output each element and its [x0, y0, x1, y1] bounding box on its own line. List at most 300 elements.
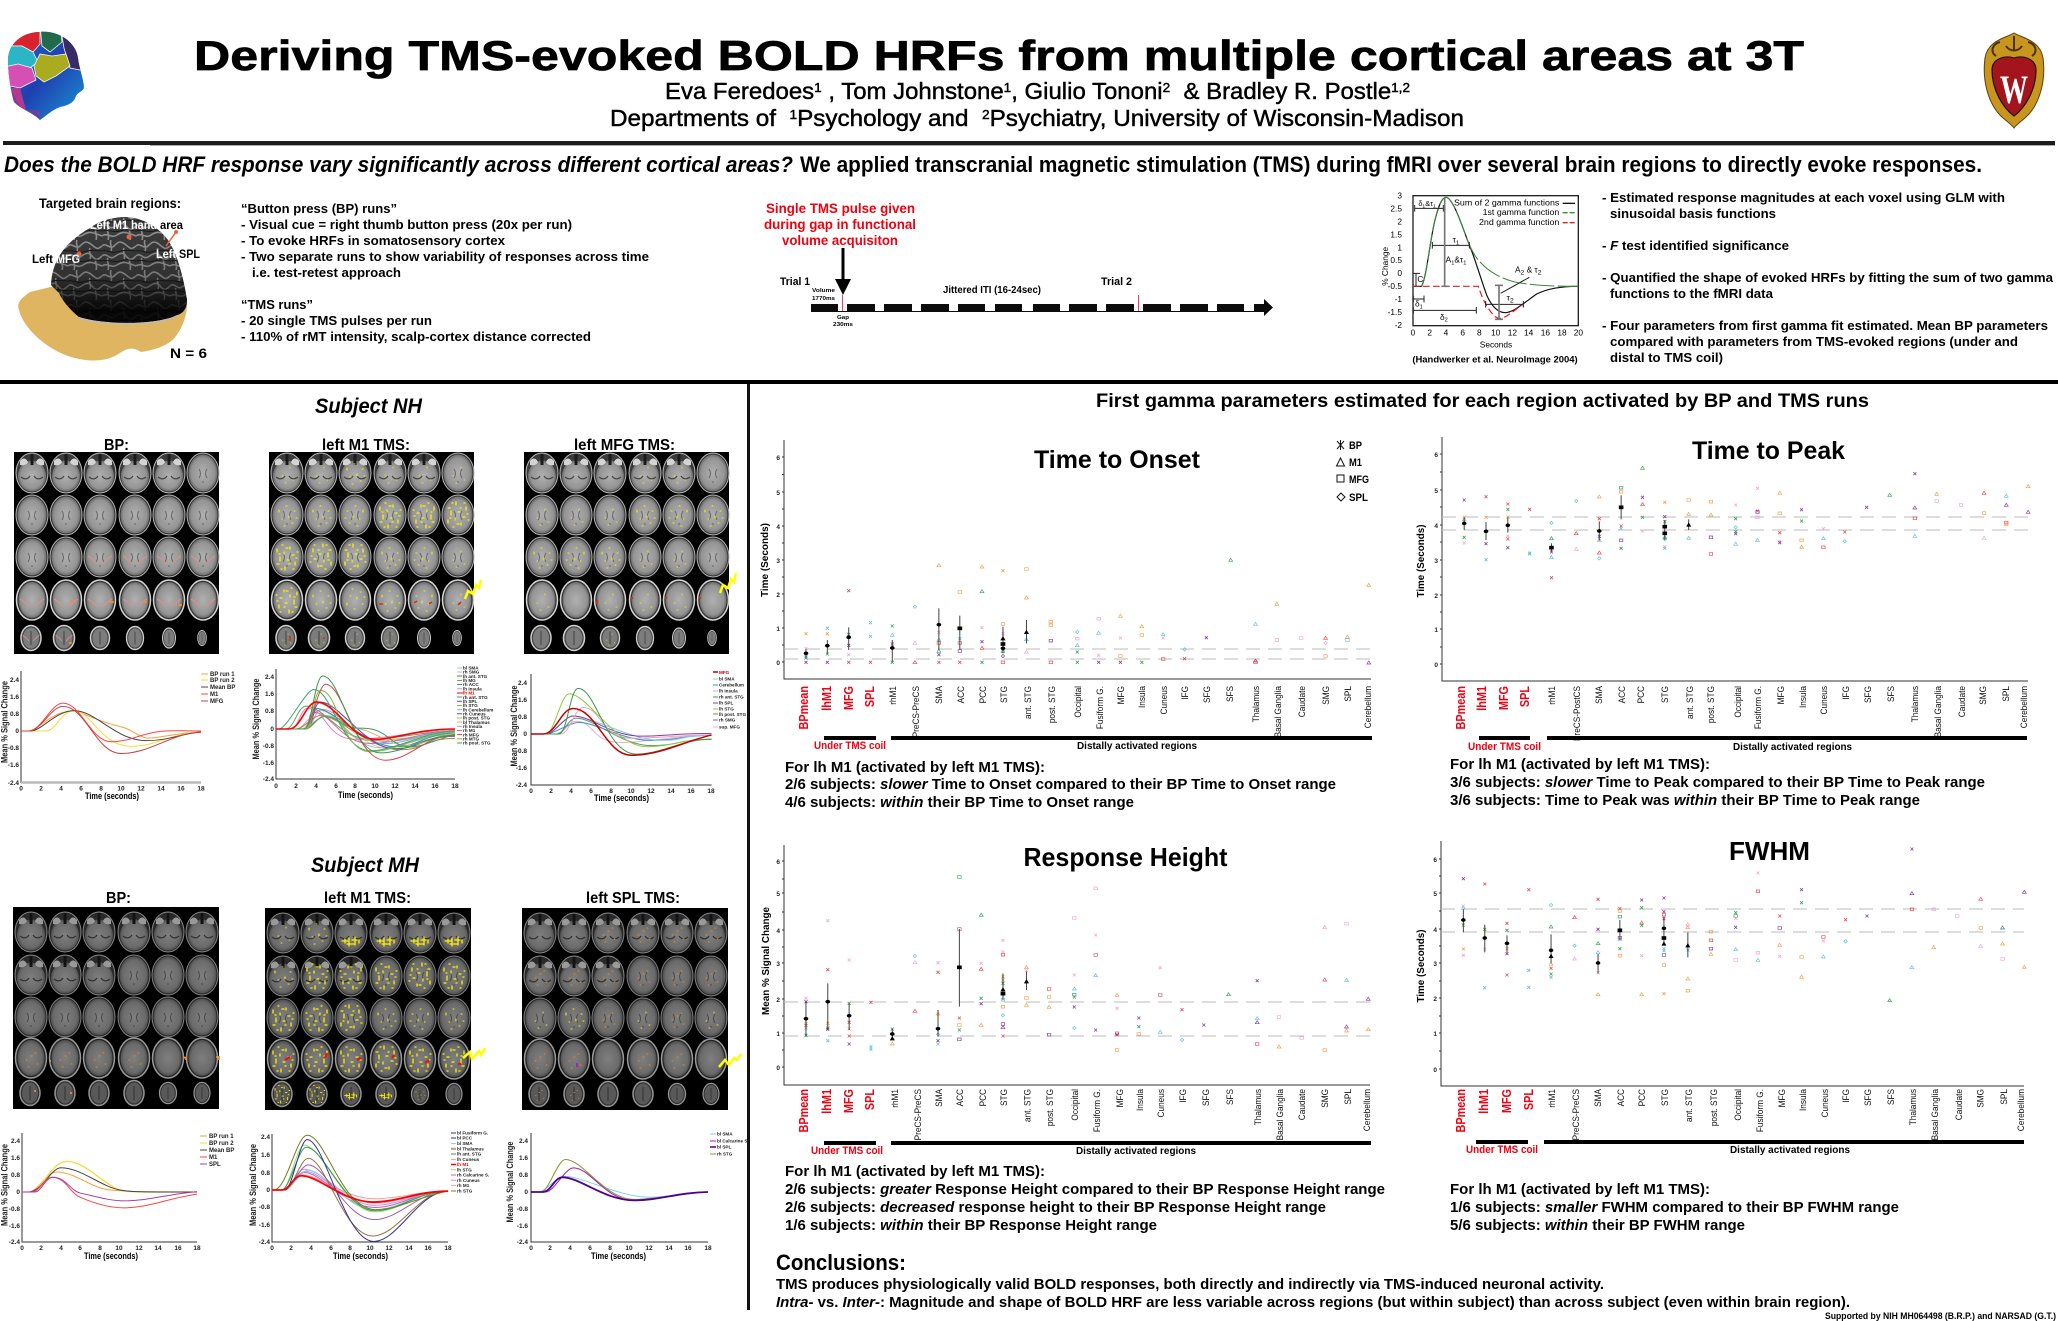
x labels: distal regions: Thalamus [1250, 685, 1261, 722]
x labels: distal regions: ant. STG [1683, 1089, 1694, 1122]
chart: NH MFG TMS time courses [509, 670, 746, 803]
tick labels: -0.8 [259, 1204, 270, 1211]
legend: rh STG [717, 1152, 733, 1156]
axis tick labels: 2.5 [1390, 203, 1402, 213]
tick labels: 1.6 [11, 1155, 20, 1162]
legend: lh Cerebellum [463, 707, 493, 712]
tick labels: 6 [334, 783, 338, 790]
BP range lines [1441, 909, 2024, 932]
legend [1454, 198, 1575, 227]
callout: TMS pulse: during gap in functional [764, 217, 916, 232]
panel: targeted brain regions [18, 196, 207, 361]
tick labels: 0 [529, 1245, 533, 1252]
y tick labels: 4 [776, 524, 780, 531]
x labels: under coil: BPmean [797, 686, 811, 729]
logo: puzzle head [8, 32, 84, 120]
x labels: distal regions: ACC [1616, 685, 1627, 703]
axis title: y: Mean % Signal Change [505, 1142, 515, 1222]
tick labels: 2 [549, 788, 553, 795]
annotation labels: δ [1418, 199, 1422, 208]
tick labels: 14 [154, 1245, 162, 1252]
legend: sup. MFG [719, 724, 740, 730]
x labels: distal regions: Cuneus [1819, 1088, 1830, 1117]
trial labels: Trial 1 [780, 276, 810, 288]
x labels: under coil: SPL [863, 1089, 877, 1110]
y tick labels: 0 [1434, 662, 1438, 669]
x labels: distal regions: post. STG [1046, 686, 1057, 723]
axis title: x: Time (seconds) [85, 791, 139, 801]
x labels: distal regions: Basal Ganglia [1274, 1089, 1285, 1140]
tick labels: 8 [353, 783, 357, 790]
tick labels: 2 [548, 1245, 552, 1252]
x labels: distal regions: post. STG [1044, 1089, 1055, 1126]
region labels: Left [32, 252, 53, 266]
x labels: distal regions: Occipital [1069, 1089, 1080, 1121]
x labels: under coil [1454, 686, 1532, 729]
x labels: distal regions: Insula [1136, 686, 1147, 708]
legend: rh MFG [463, 732, 480, 737]
text: analysis methods: compared with parameters from TMS-evoked regions (under and [1610, 334, 2018, 349]
icon: TMS bolt [463, 1048, 485, 1059]
region labels: area [160, 218, 183, 232]
trial labels: Trial 2 [1101, 276, 1132, 288]
tick labels: 1.6 [261, 1152, 270, 1159]
legend [201, 672, 235, 705]
curve: second gamma [1413, 286, 1523, 318]
affiliations: 2 [982, 107, 990, 122]
legend: 2nd gamma function [1479, 218, 1559, 227]
x labels: distal regions: SMA [933, 686, 944, 704]
legend: rh ant. STG [463, 695, 488, 700]
tick labels: -0.8 [517, 1206, 528, 1213]
tick labels: -1.6 [263, 760, 274, 767]
text: run descriptions: - 20 single TMS pulses per run [241, 313, 432, 328]
x labels: distal regions: Occipital [1732, 1089, 1743, 1121]
legend: lh Cuneus [457, 1157, 480, 1162]
tick labels: 0 [266, 1187, 270, 1194]
annotation labels: δ [1440, 312, 1445, 322]
tick labels: 18 [444, 1245, 452, 1252]
trial labels: Gap [837, 315, 850, 321]
x labels: distal regions: SMG [1320, 686, 1331, 705]
tick labels: -1.6 [516, 765, 527, 772]
legend: rh Insula [463, 724, 483, 729]
legend: Sum of 2 gamma functions [1454, 198, 1559, 207]
x labels: distal regions: Thalamus [1907, 1088, 1918, 1125]
text: analysis methods: sinusoidal basis functions [1610, 206, 1776, 221]
x labels: distal regions: MFG [1776, 1089, 1787, 1107]
x labels: distal regions: post. STG [1705, 686, 1716, 723]
x labels: distal regions: SFS [1224, 686, 1235, 702]
tick labels [517, 1138, 712, 1252]
tick labels: 0 [270, 1245, 274, 1252]
legend: BP run 2 [210, 678, 235, 684]
legend: lh post. STG [719, 712, 746, 717]
axis tick labels: -1 [1395, 294, 1402, 304]
x labels: distal regions: Fusiform G. [1754, 1089, 1765, 1132]
legend: bl SMA [719, 676, 735, 682]
group labels: Distally activated regions [1730, 1144, 1850, 1156]
y tick labels: 2 [1433, 996, 1437, 1003]
x labels: distal regions: IFG [1840, 1089, 1851, 1103]
tick labels: 0 [524, 1189, 528, 1196]
x labels: distal regions: Occipital [1732, 686, 1743, 718]
annotation labels: τ [1507, 293, 1510, 303]
scatter points [804, 876, 1370, 1051]
findings text: For lh M1 (activated by left M1 TMS): [785, 759, 1045, 776]
x labels: distal regions: ant. STG [1684, 686, 1695, 719]
tick labels: 0.8 [10, 711, 19, 718]
legend: rh ant. STG [719, 694, 744, 700]
tick labels: 0.8 [519, 1172, 528, 1179]
tick labels: 1.6 [10, 694, 19, 701]
tick labels: -0.8 [263, 743, 274, 750]
x labels: under coil: SPL [1518, 686, 1532, 707]
curves [21, 703, 201, 753]
x labels: distal regions: Cerebellum [2018, 686, 2029, 728]
x labels: distal regions: ACC [1615, 1088, 1626, 1106]
x labels: distal regions: SMA [1593, 686, 1604, 704]
curves [272, 1135, 448, 1241]
legend: rh Cuneus [457, 1178, 480, 1183]
panel: time to peak [1415, 437, 2030, 809]
y tick labels: 4 [1433, 927, 1437, 934]
annotation labels: 1 [1420, 304, 1423, 310]
tick labels: 10 [366, 1245, 374, 1252]
x labels: distal regions: Insula [1797, 1089, 1808, 1111]
text: run descriptions [241, 201, 649, 344]
y tick labels: 2 [1434, 593, 1438, 600]
legend: lh STG [457, 1167, 472, 1172]
curves [22, 1161, 197, 1208]
authors: 1,2 [1391, 80, 1410, 95]
x labels: distal regions: PreCS-PostCS [1571, 686, 1582, 741]
x labels: distal regions: SFG [1200, 1089, 1211, 1106]
axis tick labels: 3 [1397, 190, 1402, 200]
x tick labels: 20 [1574, 327, 1583, 337]
x labels: distal regions: SPL [1998, 1089, 2009, 1105]
axis title: y: Mean % Signal Change [248, 1144, 258, 1226]
x tick labels: 12 [1508, 327, 1517, 337]
brain dome [51, 217, 187, 323]
tick labels [8, 677, 205, 792]
map heading: left MFG TMS: left MFG TMS: [574, 437, 675, 454]
tick labels: 0 [15, 728, 19, 735]
chart: NH M1 TMS time courses [251, 666, 493, 800]
findings text: 3/6 subjects: slower Time to Peak compared to their BP Time to Peak range [1450, 774, 1985, 791]
trial labels: Volume [812, 288, 835, 294]
x labels: distal regions: Caudate [1953, 1089, 1964, 1120]
text: analysis methods: - Four parameters from first gamma fit estimated. Mean BP parameters [1602, 318, 2048, 333]
tick labels: 2.4 [518, 680, 527, 687]
tick labels: 6 [79, 786, 83, 792]
axis tick labels: -2 [1395, 320, 1402, 330]
legend: lh SPL [463, 699, 477, 704]
chart title: FWHM [1729, 836, 1810, 866]
research question: Does the BOLD HRF response vary significantly across different cortical areas? [4, 152, 793, 177]
tick labels: -2.4 [517, 1239, 528, 1246]
text: run descriptions: - Visual cue = right thumb button press (20x per run) [241, 217, 572, 232]
axis title: y: Mean % Signal Change [251, 678, 261, 760]
affiliations: 1 [789, 107, 797, 122]
axis title: Time (Seconds) [1415, 524, 1427, 598]
tick labels: 12 [385, 1245, 393, 1252]
annotation labels: δ [1415, 299, 1420, 309]
x labels: distal regions: STG [1659, 1089, 1670, 1106]
x labels: under coil: lhM1 [1477, 1089, 1491, 1114]
y tick labels: 1 [776, 1031, 780, 1038]
legend: rh post. STG [463, 741, 491, 746]
tick labels: 16 [174, 1245, 182, 1252]
tick labels: 8 [608, 1245, 612, 1252]
x labels: distal regions: SMA [1592, 1089, 1603, 1107]
x labels: distal regions: rhM1 [1546, 686, 1557, 705]
x labels: under coil: lhM1 [820, 1089, 834, 1114]
map heading: BP: BP: [106, 890, 131, 907]
tick labels: 16 [177, 786, 185, 792]
text: analysis methods: - Estimated response magnitudes at each voxel using GLM with [1602, 190, 2005, 205]
y tick labels: 0 [1433, 1067, 1437, 1074]
affiliations: Psychiatry, University of Wisconsin-Madison [990, 105, 1464, 131]
x labels: distal regions: MFG [1115, 686, 1126, 704]
icon: TMS bolt [465, 580, 481, 599]
legend: bl Thalamus [457, 1146, 484, 1151]
authors: , Tom Johnstone [822, 78, 1004, 104]
findings text: 5/6 subjects: within their BP FWHM range [1450, 1217, 1745, 1234]
tick labels: 14 [667, 788, 675, 795]
tick labels: 6 [329, 1245, 333, 1252]
tick labels: 2 [289, 1245, 293, 1252]
tick labels: 2 [39, 1245, 43, 1252]
legend: rh SMG [463, 670, 480, 675]
y tick labels: 5 [776, 490, 780, 497]
legend: lh ant. STG [463, 674, 488, 679]
tick labels: 4 [569, 788, 573, 795]
legend: lh Insula [719, 688, 738, 694]
tick labels: 18 [451, 783, 459, 790]
tick labels: 10 [115, 1245, 123, 1252]
tick labels: 0 [270, 726, 274, 733]
x labels: distal regions: Basal Ganglia [1932, 686, 1943, 737]
tick labels: -1.6 [8, 762, 19, 769]
legend: M1 [209, 1155, 218, 1161]
icon: TMS bolt [720, 573, 736, 593]
findings text: For lh M1 (activated by left M1 TMS): [1450, 1181, 1710, 1198]
tick labels: -2.4 [8, 780, 19, 787]
icon: TMS bolt [719, 1054, 741, 1067]
group labels: Distally activated regions [1077, 740, 1197, 752]
tick labels: 18 [193, 1245, 201, 1252]
legend: lh STG [719, 706, 734, 712]
legend: lh MG [463, 678, 476, 683]
annotation labels: C [1417, 274, 1423, 284]
y tick labels: 2 [776, 592, 780, 599]
conclusions [776, 1250, 1850, 1311]
legend: bl Thalamus [463, 720, 490, 725]
arrow: pulse [835, 248, 851, 295]
tick labels: 0.8 [11, 1172, 20, 1179]
group labels: Under TMS coil [1468, 741, 1541, 753]
y tick labels [1434, 452, 1438, 669]
trial labels [780, 276, 1132, 328]
x labels: under coil: BPmean [1454, 686, 1468, 729]
group bars [824, 1141, 1371, 1145]
x labels: distal regions: SFS [1224, 1089, 1235, 1105]
tick labels: 0 [529, 788, 533, 795]
legend [200, 1134, 234, 1168]
x tick labels: 16 [1541, 327, 1550, 337]
y tick labels: 5 [776, 891, 780, 898]
x labels: distal regions [1546, 1088, 2026, 1140]
authors: 1 [1004, 80, 1011, 95]
tick labels: 4 [59, 786, 63, 792]
tick labels: 0 [16, 1189, 20, 1196]
tick labels: 4 [314, 783, 318, 790]
text: analysis methods: - Quantified the shape of evoked HRFs by fitting the sum of two gamma [1602, 270, 2054, 285]
tick labels: 2.4 [11, 1138, 20, 1145]
volume blocks [811, 299, 1273, 316]
legend [457, 666, 493, 746]
chart title: Time to Peak [1692, 437, 1845, 465]
tick labels: 6 [78, 1245, 82, 1252]
annotation labels: 2 [1510, 297, 1514, 304]
findings text [785, 759, 1336, 811]
axes [1439, 841, 2024, 1086]
crest: University of Wisconsin [1984, 33, 2044, 128]
tick labels: -2.4 [259, 1239, 270, 1246]
group labels [1468, 741, 1852, 753]
x labels: distal regions: SMA [933, 1089, 944, 1107]
findings text: 1/6 subjects: smaller FWHM compared to their BP FWHM range [1450, 1199, 1899, 1216]
findings text [1450, 756, 1985, 809]
scatter points [804, 558, 1371, 664]
text: run descriptions: “Button press (BP) runs” [241, 201, 397, 216]
tick labels: 14 [405, 1245, 413, 1252]
tick labels: -1.6 [517, 1223, 528, 1230]
group labels: Distally activated regions [1733, 741, 1852, 753]
panel: time to onset [759, 440, 1373, 811]
x labels: distal regions: SPL [1342, 1089, 1353, 1105]
x labels: distal regions: rhM1 [889, 1089, 900, 1108]
x labels: distal regions: Occipital [1072, 686, 1083, 718]
x labels: distal regions: rhM1 [1546, 1089, 1557, 1108]
tick labels: 12 [645, 1245, 653, 1252]
annotation labels [1415, 199, 1542, 324]
research question: We applied transcranial magnetic stimulation (TMS) during fMRI over several brain regions to directly evoke responses. [800, 152, 1982, 177]
x labels: distal regions: PCC [1635, 685, 1646, 703]
panel: response height [760, 842, 1385, 1234]
heading: first gamma parameters: First gamma parameters estimated for each region activated by BP and TMS runs [1096, 390, 1869, 412]
text: analysis methods [1602, 190, 2054, 365]
tick labels: 2.4 [261, 1134, 270, 1141]
x labels: distal regions: MFG [1775, 686, 1786, 704]
y tick labels: 6 [776, 455, 780, 462]
tick labels: -1.6 [9, 1223, 20, 1230]
x tick labels: 4 [1444, 327, 1449, 337]
legend: BP run 1 [210, 672, 235, 678]
findings text: 2/6 subjects: greater Response Height compared to their BP Response Height range [785, 1181, 1385, 1198]
legend [713, 670, 746, 730]
x tick labels: 14 [1524, 327, 1534, 337]
x labels: distal regions: Caudate [1956, 686, 1967, 717]
tick labels: 4 [568, 1245, 572, 1252]
group labels [1466, 1144, 1850, 1156]
x labels: distal regions: Caudate [1296, 1089, 1307, 1120]
tick labels: 8 [609, 788, 613, 795]
legend: BP run 1 [209, 1134, 234, 1140]
title: Deriving TMS-evoked BOLD HRFs from multiple cortical areas at 3T [194, 32, 1804, 79]
tick labels: 2.4 [519, 1138, 528, 1145]
x labels: distal regions: SFG [1862, 686, 1873, 703]
trial labels: 230ms [833, 322, 853, 328]
legend: BP run 2 [209, 1141, 234, 1147]
tick labels: 2.4 [10, 677, 19, 684]
chart title: Time to Onset [1034, 446, 1201, 474]
tick labels: 10 [117, 786, 125, 792]
legend: 1st gamma function [1483, 208, 1559, 217]
y tick labels: 4 [776, 928, 780, 935]
trial labels: 1770ms [812, 296, 835, 302]
annotation labels: &τ [1454, 255, 1464, 265]
legend: bl SMA [463, 666, 479, 670]
tick labels [259, 1134, 452, 1252]
region labels: Left M1 hand [90, 218, 157, 232]
legend: rh Calcarine S. [457, 1172, 489, 1178]
x labels: distal regions: SFG [1201, 686, 1212, 703]
x labels: distal regions: SFS [1885, 1089, 1896, 1105]
tick labels: 4 [59, 1245, 63, 1252]
brain map: MH left M1 TMS [265, 908, 471, 1110]
y axis label: % Change [1380, 247, 1390, 286]
callout: TMS pulse [764, 201, 916, 248]
axis title: Time (Seconds) [1415, 930, 1427, 1002]
y tick labels: 3 [1434, 558, 1438, 565]
group bars [1479, 736, 2027, 740]
x labels: distal regions: Cerebellum [1362, 686, 1373, 728]
tick labels: 8 [348, 1245, 352, 1252]
x tick labels: 8 [1477, 327, 1482, 337]
text: run descriptions: - To evoke HRFs in somatosensory cortex [241, 233, 506, 248]
findings text: For lh M1 (activated by left M1 TMS): [785, 1163, 1045, 1180]
tick labels: 14 [665, 1245, 673, 1252]
citation: (Handwerker et al. NeuroImage 2004) [1412, 355, 1578, 365]
x labels: distal regions: rhM1 [887, 686, 898, 705]
tick labels: -2.4 [516, 782, 527, 789]
legend: Mean BP [210, 685, 235, 691]
legend: bl PCC [457, 1136, 473, 1141]
BP range lines [1442, 517, 2028, 530]
conclusions heading: Conclusions: [776, 1250, 906, 1275]
legend: MFG [719, 670, 730, 675]
axis title: x: Time (seconds) [84, 1251, 138, 1261]
tick labels: 4 [309, 1245, 313, 1252]
legend: M1 [210, 692, 219, 698]
x labels: under coil: MFG [1497, 686, 1511, 710]
x labels: distal regions [887, 685, 1373, 737]
y tick labels: 3 [1433, 961, 1437, 968]
tick labels: 14 [411, 783, 419, 790]
x labels: distal regions: IFG [1177, 1089, 1188, 1103]
tick labels: 6 [589, 788, 593, 795]
axes [782, 440, 1371, 679]
x labels: distal regions: Cuneus [1158, 685, 1169, 714]
panel: trial timeline [764, 201, 1273, 328]
annotations [1413, 205, 1529, 314]
y tick labels: 6 [1433, 857, 1437, 864]
tick labels [516, 680, 715, 795]
annotation labels: τ [1453, 235, 1456, 245]
group labels: Under TMS coil [811, 1145, 883, 1157]
